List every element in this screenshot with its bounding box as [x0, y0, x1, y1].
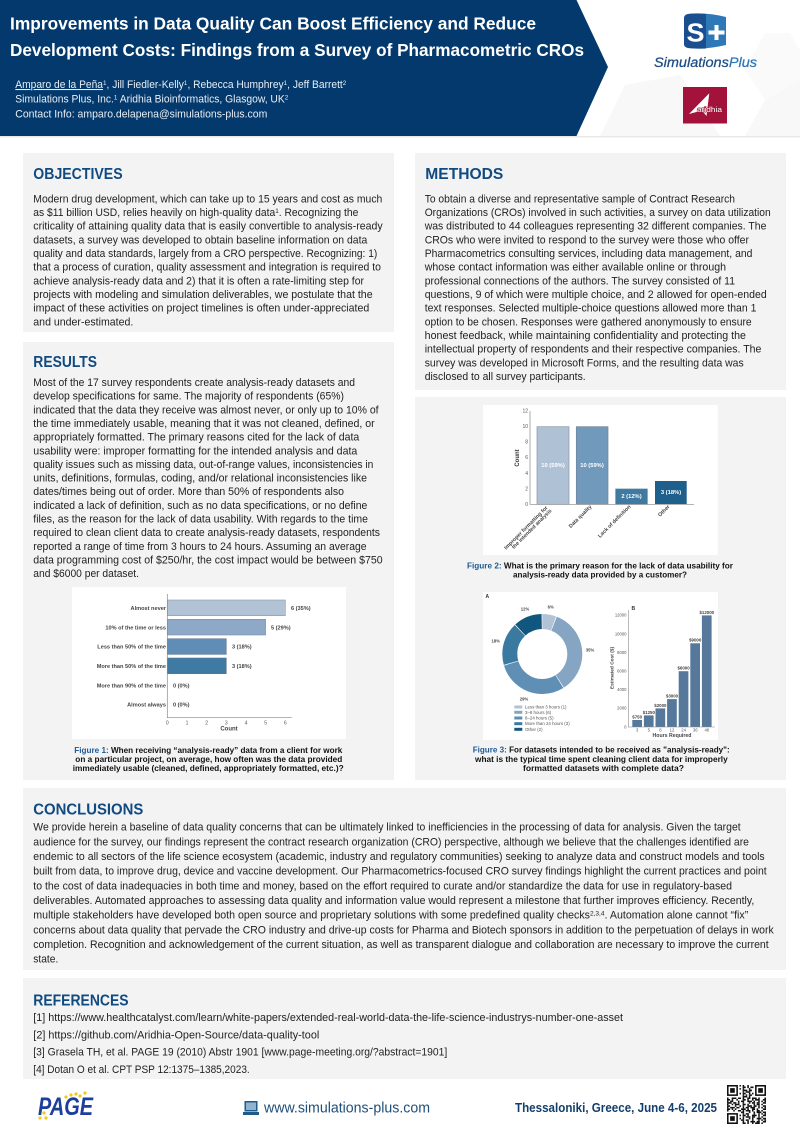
chart: cost bars B: 4000 — [617, 687, 627, 692]
text: conclusions body — [33, 822, 774, 966]
chart: figure 1 horizontal bar chart: 4 — [245, 720, 248, 726]
chart: cost bars B: 12 — [670, 728, 675, 732]
chart: figure 1 horizontal bar chart: 6 — [284, 720, 287, 726]
authors and contact: Simulations Plus, Inc. — [15, 94, 117, 106]
title — [10, 14, 584, 60]
text: objectives body: that a process of curation, quality assessment and integration is required to — [33, 262, 381, 274]
logo: PAGE: PAGE — [38, 1093, 94, 1121]
text: conclusions body: state. — [33, 954, 58, 966]
legend: Less than 3 hours (1) — [525, 704, 567, 710]
chart: figure 1 horizontal bar chart: 1 — [186, 720, 189, 726]
text: methods body: whose contact information was either available online or through — [424, 262, 726, 274]
chart: cost bars B: 6000 — [617, 668, 627, 674]
authors and contact: 1 — [284, 80, 288, 87]
chart: cost bars B: B — [632, 606, 636, 612]
chart: figure 2 vertical bar chart: Lack of definition — [597, 504, 632, 539]
chart: figure 1 horizontal bar chart: 5 — [264, 720, 267, 726]
chart: cost bars B: 5 — [648, 728, 651, 732]
heading: objectives: OBJECTIVES — [33, 166, 123, 183]
caption: figure 3: Figure 3: For datasets intended to be received as "analysis-ready": — [473, 745, 730, 755]
text: conclusions body: completion. Recognition and acknowledgement of the current situation, as well as transparent dialogue and collaboration are necessary to improve the current — [33, 939, 769, 951]
caption: figure 1: immediately usable (cleaned, defined, appropriately formatted, etc.)? — [73, 763, 344, 773]
text: methods body: option to be chosen. Responses were gathered anonymously to ensure — [425, 316, 752, 328]
chart: figure 1 horizontal bar chart: 0 (0%) — [173, 703, 190, 709]
panel: references — [23, 978, 786, 1079]
chart: cost bars B: 8000 — [617, 650, 627, 655]
text: results body: required to clean client data to create analysis-ready datasets, respondents — [33, 527, 380, 539]
chart: cost bars B: $1250 — [643, 710, 655, 715]
text: objectives body: 1 — [275, 208, 279, 215]
chart: cost bars B: $3000 — [666, 694, 679, 698]
chart: cost bars B: 12000 — [615, 613, 627, 618]
chart: cost bars B: 8 — [659, 728, 662, 732]
text: methods body: intellectual property of respondents and their respective companies. The — [425, 344, 761, 356]
authors and contact: , Jeff Barrett — [287, 79, 343, 91]
text: references list: [4] Dotan O et al. CPT PSP 12:1375–1385,2023. — [33, 1064, 250, 1076]
caption: figure 3 — [473, 745, 730, 773]
chart: figure 1 horizontal bar chart — [72, 587, 346, 739]
text: results body: reported a range of time from 3 hours to 24 hours. Assuming an average — [33, 541, 367, 553]
text: objectives body: impact of these activities on project timelines is often under-appreciated — [33, 303, 369, 315]
authors and contact: Aridhia Bioinformatics, Glasgow, UK — [117, 94, 285, 106]
text: references list: [3] Grasela TH, et al. PAGE 19 (2010) Abstr 1901 [www.page-meeting.org/?abstract=1901] — [33, 1047, 447, 1059]
text: results body: appropriately formatted. The primary reasons cited for the lack of data — [33, 432, 359, 444]
legend: More than 24 hours (3) — [525, 721, 570, 726]
text: references list — [33, 1012, 623, 1076]
chart: cost bars B: $6000 — [677, 666, 690, 671]
text: conclusions body: 2,3,4 — [590, 911, 605, 918]
authors and contact: , Jill Fiedler-Kelly — [107, 79, 185, 91]
title: Improvements in Data Quality Can Boost Efficiency and Reduce — [10, 14, 536, 34]
chart: donut A — [486, 594, 594, 732]
legend: 3–8 hours (6) — [525, 710, 552, 715]
text: results body: Most of the 17 survey respondents create analysis-ready datasets and — [33, 377, 355, 389]
text: methods body: Organizations (CROs) involved in such activities, a survey on data utilization — [425, 207, 771, 219]
chart: figure 1 horizontal bar chart: 0 (0%) — [173, 683, 190, 689]
text: objectives body: criticality of attaining quality data that is easily convertible to analysis-ready — [33, 221, 383, 233]
authors and contact: 1 — [103, 80, 107, 87]
chart: cost bars B: 2000 — [617, 706, 627, 711]
website url: www.simulations-plus.com — [263, 1100, 430, 1117]
chart: figure 1 horizontal bar chart: Almost always — [127, 703, 166, 709]
panel: methods — [415, 153, 786, 390]
text: conclusions body: to the cost of data inadequacies in both time and money, based on the effort required to curate and/or standardize the data for use in regulatory-based — [33, 880, 732, 892]
chart: figure 1 horizontal bar chart: 3 — [225, 720, 228, 726]
text: methods body: was distributed to 44 colleagues representing 32 different companies. The — [424, 221, 766, 233]
title: Development Costs: Findings from a Survey of Pharmacometric CROs — [10, 40, 584, 60]
chart: figure 2 vertical bar chart: 10 — [522, 424, 528, 430]
text: methods body: Pharmacometrics consulting services, including data management, and — [425, 248, 753, 260]
chart: figure 1 horizontal bar chart: 6 (35%) — [291, 606, 311, 612]
text: objectives body: projects with modeling and simulation deliverables, we postulate that the — [33, 289, 373, 301]
chart: figure 1 horizontal bar chart: 3 (18%) — [232, 664, 252, 670]
chart: donut A: 18% — [492, 638, 500, 644]
chart: figure 1 horizontal bar chart: 2 — [205, 720, 208, 726]
text: objectives body — [33, 193, 383, 328]
text: conclusions body: built from data, to improve drug, device and vaccine development. Our Pharmacometrics-focused CRO survey findings highlight the current practices and point — [33, 866, 767, 878]
chart: figure 2 vertical bar chart: 2 — [525, 486, 528, 492]
text: conclusions body: deliverables. Automated approaches to assessing data quality and information value would represent a milestone that further improves efficiency. Recently, — [33, 895, 754, 907]
text: results body: and $6000 per dataset. — [33, 568, 139, 580]
text: objectives body: datasets, a survey was developed to obtain baseline information on data — [33, 234, 367, 246]
chart: cost bars B: 0 — [624, 724, 627, 729]
caption: figure 1 — [73, 745, 344, 773]
caption: figure 1: Figure 1: When receiving “analysis-ready” data from a client for work — [74, 745, 343, 755]
chart: figure 1 horizontal bar chart: 0 — [166, 720, 169, 726]
chart: figure 2 vertical bar chart: 2 (12%) — [621, 494, 642, 500]
text: conclusions body: multiple stakeholders have developed both open source and proprietary solutions with some predefined quality checks — [33, 910, 587, 922]
chart: cost bars B — [610, 606, 715, 739]
text: results body: data programming cost of $250/hr, the cost impact would be between $750 — [33, 554, 383, 566]
legend: 8–24 hours (5) — [525, 716, 554, 720]
text: results body — [33, 377, 383, 580]
chart: figure 1 horizontal bar chart: More than 90% of the time — [97, 683, 166, 689]
chart: cost bars B: $9000 — [689, 638, 702, 643]
panel: figures 2 and 3 — [415, 397, 786, 780]
heading: conclusions: CONCLUSIONS — [33, 802, 143, 818]
caption: figure 1: on a particular project, on average, how often was the data provided — [75, 754, 342, 764]
chart: figure 2 vertical bar chart: 4 — [525, 471, 528, 477]
chart: figure 1 horizontal bar chart: 10% of the time or less — [105, 625, 166, 631]
chart: figure 1 horizontal bar chart: 5 (29%) — [271, 625, 291, 631]
authors and contact — [15, 79, 347, 120]
text: results body: units, definitions, formulas, coding, and/or relational inconsistencies like — [33, 473, 367, 485]
authors and contact: Amparo de la Peña — [15, 79, 103, 91]
chart: figure 2 vertical bar chart: 12 — [522, 409, 528, 415]
text: results body: quality issues such as missing data, out-of-range values, inconsistencies in — [33, 459, 373, 471]
text: objectives body: and under-estimated. — [33, 316, 133, 328]
text: results body: files, as the reason for the lack of data usability. With regards to the time — [33, 514, 368, 526]
text: results body: indicated a lack of definition, such as no data specifications, or no define — [33, 500, 367, 512]
text: conclusions body: . Automation alone cannot “fix” — [605, 910, 749, 922]
text: objectives body: achieve analysis-ready data and 2) that it is often a rate-limiting step for — [33, 275, 364, 287]
chart: figure 2 vertical bar chart: Data quality — [568, 504, 593, 530]
text: results body: usability were: improper formatting for the intended analysis and data — [33, 445, 357, 457]
text: references list: [2] https://github.com/Aridhia-Open-Source/data-quality-tool — [33, 1029, 319, 1041]
chart: figure 3 donut and bar — [483, 592, 718, 740]
heading: references: REFERENCES — [33, 993, 129, 1010]
heading: results: RESULTS — [33, 354, 97, 371]
logo: Simulations Plus — [654, 13, 757, 70]
chart: donut A: 29% — [520, 696, 528, 702]
text: objectives body: . Recognizing the — [279, 207, 358, 219]
caption: figure 3: what is the typical time spent cleaning client data for improperly — [474, 754, 728, 764]
chart: cost bars B: $750 — [632, 714, 643, 720]
chart: cost bars B: Estimated Cost ($) — [610, 647, 616, 689]
text: references list: [1] https://www.healthcatalyst.com/learn/white-papers/extended-real-world-data-the-life-science-industrys-number-one-asset — [33, 1012, 623, 1024]
text: results body: indicated that the data they receive was almost never, or only up to 10% of — [33, 404, 379, 416]
chart: figure 2 vertical bar chart: Improper formatting for — [503, 505, 549, 551]
text: conclusions body: We provide herein a baseline of data quality concerns that can be ultimately linked to inefficiencies in the processing of data for analysis. Given the target — [33, 822, 741, 834]
text: results body: develop specifications for same. The majority of respondents (65%) — [33, 391, 344, 403]
text: methods body: CROs who were invited to respond to the survey were those who offer — [425, 234, 749, 246]
chart: figure 2 vertical bar chart: 0 — [525, 502, 528, 508]
text: objectives body: as $11 billion USD, relies heavily on high-quality data — [33, 207, 282, 219]
caption: figure 3: formatted datasets with complete data? — [523, 763, 684, 773]
chart: figure 1 horizontal bar chart: More than 50% of the time — [97, 664, 166, 670]
chart: figure 1 horizontal bar chart: 3 (18%) — [232, 645, 252, 651]
chart: cost bars B: $2000 — [654, 703, 667, 708]
heading: methods: METHODS — [425, 166, 503, 183]
panel: conclusions — [23, 788, 786, 970]
authors and contact: 1 — [114, 95, 118, 102]
chart: figure 1 horizontal bar chart: Less than 50% of the time — [97, 645, 166, 651]
chart: donut A: A — [486, 594, 490, 600]
panel: objectives — [23, 153, 394, 332]
chart: figure 1 horizontal bar chart: Almost never — [131, 606, 167, 612]
chart: donut A: 12% — [521, 606, 529, 612]
logo: Simulations Plus: S — [686, 18, 704, 48]
caption: figure 2 — [467, 560, 734, 580]
text: methods body: To obtain a diverse and representative sample of Contract Research — [425, 193, 735, 205]
chart: cost bars B: 36 — [693, 728, 698, 732]
chart: figure 2 vertical bar chart: 10 (59%) — [541, 463, 565, 469]
qr code — [727, 1085, 766, 1125]
authors and contact: 2 — [343, 80, 347, 87]
chart: cost bars B: 24 — [681, 728, 687, 732]
text: methods body: text responses. Selected multiple-choice questions allowed more than 1 — [425, 303, 756, 315]
text: conclusions body: concerns about data quality that pervade the CRO industry and drive-up costs for Pharma and Biotech sponsors in addition to the perpetuation of delays in work — [33, 924, 774, 936]
authors and contact: 1 — [184, 80, 188, 87]
chart: donut A: 6% — [548, 604, 554, 610]
chart: figure 2 vertical bar chart: 10 (59%) — [580, 463, 604, 469]
text: results body: dates/times being out of order. More than 50% of respondents also — [33, 486, 344, 498]
chart: donut A: 35% — [586, 648, 594, 652]
chart: cost bars B: 3 — [636, 728, 639, 732]
text: methods body: survey was developed in Microsoft Forms, and the resulting data was — [425, 357, 744, 369]
chart: figure 2 vertical bar chart: Other — [657, 504, 671, 518]
authors and contact: , Rebecca Humphrey — [187, 79, 284, 91]
chart: cost bars B: $12000 — [699, 610, 715, 615]
text: methods body: honest feedback, while maintaining confidentiality and protecting the — [425, 330, 746, 342]
logo: Simulations Plus: Simulations Plus — [654, 55, 757, 70]
text: methods body: disclosed to all survey participants. — [425, 371, 586, 383]
chart: figure 1 horizontal bar chart: Count — [220, 726, 238, 732]
chart: figure 2 vertical bar chart: Count — [515, 449, 521, 467]
text: results body: the time immediately usable, meaning that it was not cleaned, defined, or — [33, 418, 375, 430]
text: objectives body: Modern drug development, which can take up to 15 years and cost as much — [33, 193, 382, 205]
legend — [514, 704, 570, 732]
legend: Other (2) — [525, 727, 543, 732]
authors and contact: 2 — [285, 95, 289, 102]
header banner — [0, 0, 608, 136]
text: objectives body: quality and data standards, largely from a CRO perspective. Recognizing: 1) — [33, 248, 377, 260]
chart: figure 2 vertical bar chart: 6 — [525, 455, 528, 461]
text: conclusions body: audience for the survey, our findings represent the contract research organization (CRO) perspective, although we believe that the challenges identified are — [33, 836, 749, 848]
caption: figure 2: analysis-ready data provided by a customer? — [513, 570, 687, 580]
logo: Aridhia — [683, 87, 727, 124]
chart: cost bars B: Hours Required — [653, 733, 691, 739]
text: methods body — [424, 193, 771, 383]
text: methods body: professional connections of the authors. The survey consisted of 11 — [425, 275, 735, 287]
chart: figure 2 vertical bar chart: the intended analysis — [511, 508, 553, 551]
chart: figure 2 vertical bar chart: 8 — [525, 440, 528, 446]
caption: figure 2: Figure 2: What is the primary reason for the lack of data usability for — [467, 560, 734, 570]
location and date: Thessaloniki, Greece, June 4-6, 2025 — [515, 1101, 717, 1115]
chart: figure 2 vertical bar chart — [483, 405, 718, 555]
authors and contact: Contact Info: amparo.delapena@simulations-plus.com — [15, 108, 267, 120]
text: methods body: questions, 9 of which were multiple choice, and 2 allowed for open-ended — [425, 289, 767, 301]
icon: laptop — [243, 1101, 259, 1115]
chart: figure 2 vertical bar chart: 3 (18%) — [661, 490, 681, 496]
chart: cost bars B: 10000 — [615, 631, 627, 636]
chart: cost bars B: 48 — [704, 728, 710, 732]
logo: Aridhia: aridhia — [697, 107, 722, 114]
panel: results — [23, 342, 394, 780]
text: conclusions body: endemic to all sectors of the life science ecosystem (academic, industry and regulatory communities) seeking to analyze data and construct models and tools — [33, 851, 765, 863]
